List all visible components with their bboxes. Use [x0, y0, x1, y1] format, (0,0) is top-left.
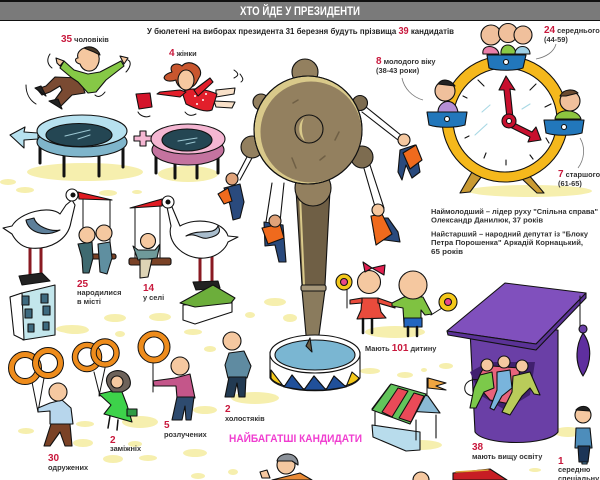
carousel pole	[296, 190, 330, 352]
carousel rider 4	[371, 204, 400, 245]
swing with two people	[78, 200, 116, 274]
label: children count: Мають 101 дитину	[365, 343, 437, 354]
person at bottom	[413, 472, 429, 480]
label: specialised education: середню	[558, 465, 591, 474]
text: youngest and oldest candidates: 65 років	[431, 247, 463, 256]
label: older candidates: 7 старшого	[558, 169, 600, 180]
carousel rider 2	[262, 215, 286, 262]
stork over city building	[3, 189, 112, 340]
red chest at bottom	[453, 469, 507, 480]
label: born in city: народилися	[77, 288, 121, 297]
clock left person with basket	[427, 80, 467, 127]
label: married women: заміжніх	[110, 444, 142, 453]
text: youngest and oldest candidates: Наймолодший – лідер руху "Спільна справа"	[431, 207, 598, 216]
label: specialised education: 1	[558, 456, 564, 467]
man jumping	[26, 47, 130, 109]
header bar	[0, 0, 600, 21]
person with specialised education	[575, 406, 592, 464]
label: higher education: 38	[472, 442, 484, 453]
label: born in village: у селі	[143, 293, 164, 302]
label: older candidates: (61-65)	[558, 179, 582, 188]
label: middle-aged candidates: 24 середнього	[544, 25, 600, 36]
header bar: ХТО ЙДЕ У ПРЕЗИДЕНТИ	[240, 5, 360, 18]
clock top group with basket	[481, 24, 532, 70]
graduation cap building	[447, 283, 590, 442]
label: born in city: в місті	[77, 297, 101, 306]
label: young candidates: 8 молодого віку	[376, 56, 436, 67]
text: youngest and oldest candidates: Петра Порошенка" Аркадій Корнацький,	[431, 238, 583, 247]
label: married women: 2	[110, 435, 116, 446]
label: divorced: розлучених	[164, 430, 208, 439]
children with lollipops	[336, 262, 457, 336]
carousel head	[236, 59, 402, 222]
clock right person with basket	[544, 90, 584, 135]
divorced man	[153, 357, 195, 420]
label: bachelors: холостяків	[225, 414, 265, 423]
ground blotches	[0, 163, 592, 479]
carousel platform	[270, 335, 360, 391]
bachelor	[223, 332, 251, 397]
stork over village house	[130, 196, 238, 324]
label: men count: 35 чоловіків	[61, 34, 109, 45]
female symbol trampoline	[134, 124, 225, 178]
text: youngest and oldest candidates: Олександр Данилюк, 37 років	[431, 216, 543, 224]
rings group: married women	[75, 342, 116, 396]
label: born in city: 25	[77, 279, 89, 290]
label: young candidates: (38-43 роки)	[376, 66, 420, 75]
market stall	[372, 378, 446, 451]
text: youngest and oldest candidates: Найстарший – народний депутат із "Блоку	[431, 230, 589, 238]
label: divorced: 5	[164, 420, 170, 431]
label: middle-aged candidates: (44-59)	[544, 35, 568, 44]
label: born in village: 14	[143, 283, 155, 294]
married woman	[99, 371, 137, 430]
text: youngest and oldest candidates	[431, 207, 598, 256]
male symbol trampoline	[10, 115, 127, 176]
label: women count: 4 жінки	[169, 48, 197, 59]
carousel rider 3	[398, 134, 422, 180]
single ring	[141, 334, 167, 392]
married man	[38, 383, 73, 446]
label: married men: одружених	[48, 463, 89, 472]
clock leader lines	[402, 44, 584, 168]
subtitle: У бюлетені на виборах президента 31 березня будуть прізвища 39 кандидатів	[147, 26, 454, 37]
woman jumping	[136, 63, 243, 117]
old woman at bottom	[260, 454, 312, 480]
village swing person	[129, 234, 171, 278]
clock	[442, 56, 568, 193]
label: higher education: мають вищу освіту	[472, 452, 543, 461]
rings group: married men	[12, 350, 60, 412]
label: married men: 30	[48, 453, 60, 464]
heading: richest candidates: НАЙБАГАТШІ КАНДИДАТИ	[229, 432, 362, 445]
label: bachelors: 2	[225, 404, 231, 415]
carousel rider 1	[218, 173, 244, 220]
